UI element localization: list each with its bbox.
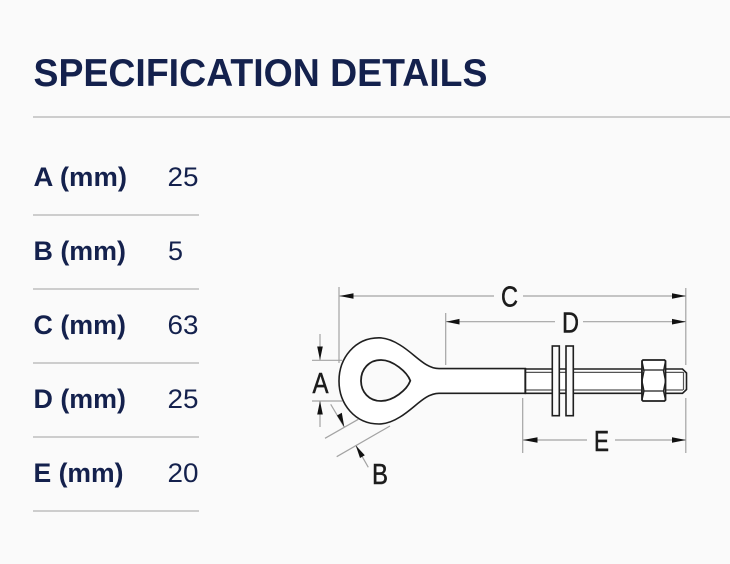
row: D: 25 [168,384,198,414]
row: E: 20 [168,458,198,488]
dimension lines [312,287,686,467]
title: SPECIFICATION DETAILS [34,52,488,95]
specification table [33,162,199,512]
threaded section [525,369,642,393]
dimension letter: C: C [501,282,518,314]
dimension letter: A: A [312,368,329,400]
washers [552,346,559,416]
row: C: C (mm) [34,310,126,340]
bolt body [339,338,686,424]
row: A: A (mm) [34,162,127,192]
row: B: B (mm) [34,236,126,266]
row: D: D (mm) [34,384,126,414]
bolt tip [665,369,686,393]
dimension letter: E: E [594,426,609,458]
dimension letter: B: B [372,459,388,491]
row: C: 63 [168,310,198,340]
row: A [33,162,199,216]
row: B [33,236,199,290]
row: C [33,310,199,364]
eye and shank outline [339,338,525,424]
eye bolt technical drawing [312,282,686,491]
row: D [33,384,199,438]
row: B: 5 [168,236,183,266]
eye hole [361,360,410,401]
row: E [33,458,199,512]
row: E: E (mm) [34,458,124,488]
dimension letter: D: D [562,308,579,340]
dimension arrowheads [317,293,686,458]
nut [642,360,666,401]
row: A: 25 [168,162,198,192]
